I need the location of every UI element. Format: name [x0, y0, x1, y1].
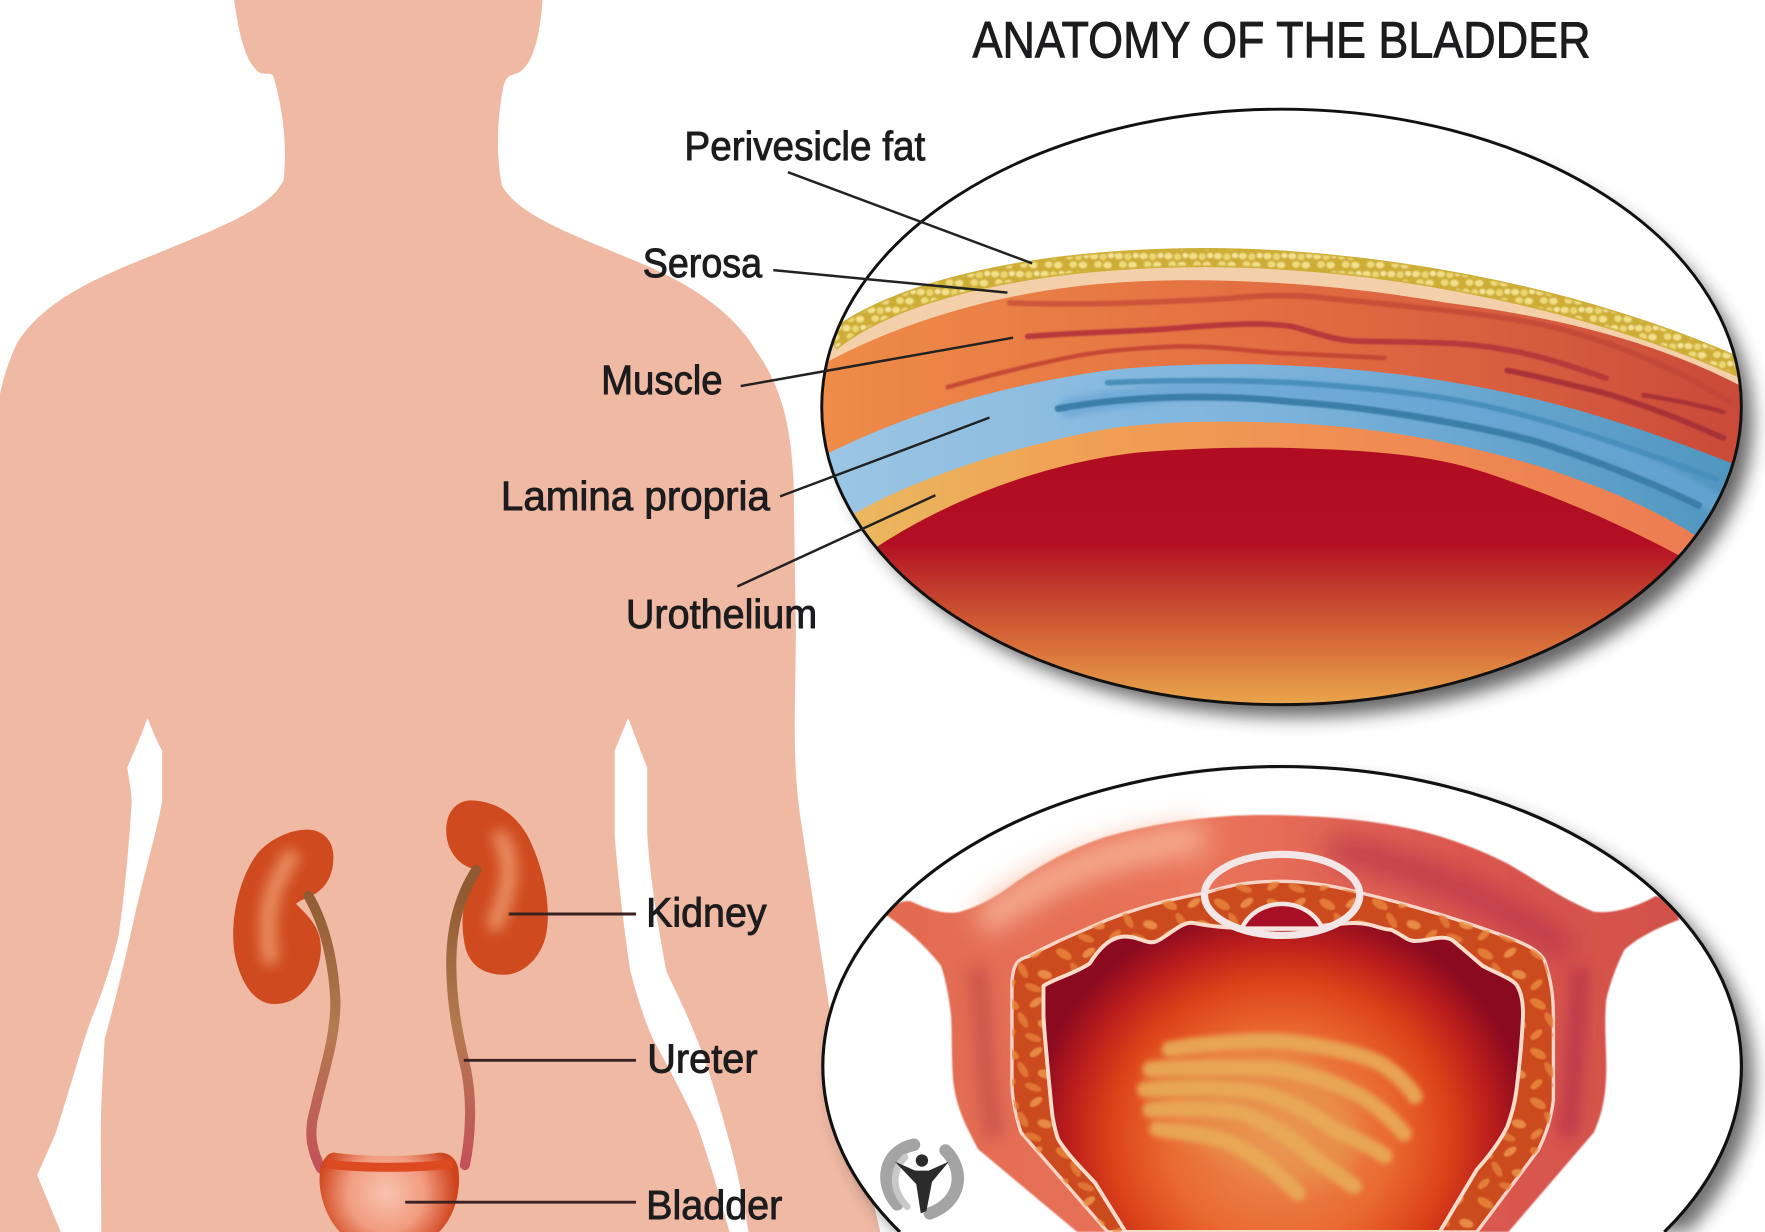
label: serosa	[643, 240, 1007, 293]
right kidney	[446, 800, 548, 975]
label: urothelium	[626, 495, 935, 637]
muscular ring	[1010, 878, 1556, 1232]
right ureter	[451, 870, 476, 1165]
label: muscle	[601, 338, 1013, 403]
body silhouette	[0, 0, 880, 1232]
highlight ring with detail arch	[1204, 854, 1360, 935]
outer bladder wall	[885, 815, 1679, 1232]
gap between left arm and torso	[37, 718, 162, 1232]
circle: bladder wall layers	[820, 108, 1765, 732]
layer: lumen	[877, 448, 1678, 703]
trigone folds	[1145, 1041, 1415, 1193]
label: perivesicle fat	[684, 123, 1032, 263]
layer: muscle	[823, 280, 1740, 463]
label: kidney: Kidney	[646, 889, 767, 935]
label: muscle: Muscle	[601, 357, 723, 403]
title: ANATOMY OF THE BLADDER	[973, 11, 1591, 68]
layer: lamina propria	[828, 364, 1732, 535]
label: bladder: Bladder	[646, 1182, 782, 1228]
gap between right arm and torso	[615, 718, 749, 1232]
circle: bladder cross-section	[823, 767, 1754, 1232]
layer: serosa	[828, 267, 1738, 385]
left kidney	[233, 830, 333, 1004]
bladder cavity	[1043, 923, 1523, 1232]
label: ureter: Ureter	[647, 1036, 758, 1082]
label: lamina propria	[501, 418, 989, 519]
label: lamina propria: Lamina propria	[501, 473, 770, 519]
logo: swirl with figure	[886, 1145, 958, 1213]
label: perivesicle fat: Perivesicle fat	[684, 123, 925, 169]
label: urothelium: Urothelium	[626, 591, 817, 637]
layer: perivesicle fat	[831, 258, 1756, 375]
layer: urothelium	[854, 422, 1695, 556]
small bladder	[320, 1153, 459, 1232]
label: serosa: Serosa	[643, 240, 762, 286]
left ureter	[308, 896, 335, 1168]
